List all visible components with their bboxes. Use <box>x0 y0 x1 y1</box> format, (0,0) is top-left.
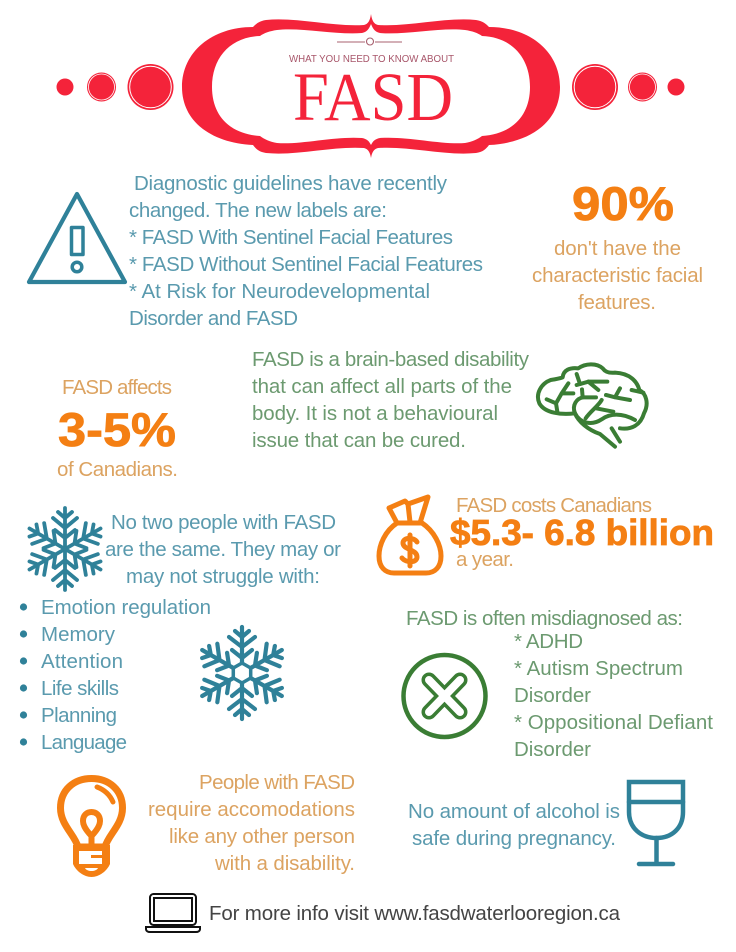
text: diagnostic guidelines: Diagnostic guidelines have recently <box>134 172 448 195</box>
decorative circles right <box>572 64 684 110</box>
stat number: 3-5% <box>58 403 176 456</box>
icon: wine glass <box>629 782 683 864</box>
text: misdiagnosed: * Oppositional Defiant <box>514 711 713 734</box>
text: accommodations: People with FASD <box>199 771 355 794</box>
icon: warning triangle <box>29 194 125 282</box>
icon: money bag <box>379 497 441 573</box>
stat caption: features. <box>578 291 656 314</box>
text: diagnostic guidelines <box>129 172 483 330</box>
text: misdiagnosed: * ADHD <box>514 630 583 653</box>
stat caption: of Canadians. <box>57 458 178 481</box>
stat: 90% <box>532 177 703 314</box>
text: brain-based disability: issue that can be cured. <box>252 429 466 452</box>
title banner <box>56 14 684 158</box>
icon: light bulb <box>60 778 122 877</box>
icon: snowflake one <box>23 508 107 590</box>
text: no alcohol: safe during pregnancy. <box>412 827 616 850</box>
footer text: For more info visit www.fasdwaterlooregion.ca <box>209 902 621 925</box>
text: no two people: No two people with FASD <box>111 511 336 534</box>
text: diagnostic guidelines: * At Risk for Neurodevelopmental <box>129 280 430 303</box>
ornate red frame <box>182 14 560 158</box>
list: struggles: Memory <box>41 623 116 646</box>
text: diagnostic guidelines: * FASD With Sentinel Facial Features <box>129 226 453 249</box>
text: accommodations <box>148 771 355 875</box>
text: no alcohol: No amount of alcohol is <box>408 800 620 823</box>
text: no two people: are the same. They may or <box>105 538 341 561</box>
text: accommodations: require accomodations <box>148 798 355 821</box>
list: struggles: Planning <box>41 704 117 727</box>
text: brain-based disability: body. It is not a behavioural <box>252 402 498 425</box>
stat: 90%: 90% <box>572 177 674 230</box>
stat number: $5.3- 6.8 billion <box>450 512 714 553</box>
text: accommodations: like any other person <box>169 825 355 848</box>
text: accommodations: with a disability. <box>214 852 355 875</box>
text: brain-based disability: that can affect all parts of the <box>252 375 512 398</box>
text: diagnostic guidelines: * FASD Without Sentinel Facial Features <box>129 253 483 276</box>
text: no two people <box>105 511 341 588</box>
FASD heading: FASD <box>293 59 453 135</box>
stat caption: a year. <box>456 548 514 571</box>
list: struggles: Attention <box>41 650 123 673</box>
list: struggles: Emotion regulation <box>41 596 211 619</box>
text: brain-based disability: FASD is a brain-based disability <box>252 348 530 371</box>
icon: laptop <box>146 894 200 932</box>
text: misdiagnosed <box>406 607 713 761</box>
text: no alcohol <box>408 800 620 850</box>
stat caption <box>532 237 703 314</box>
stat: 3-5% <box>57 376 178 481</box>
text: misdiagnosed: Disorder <box>514 684 591 707</box>
stat lead-in: FASD affects <box>62 376 172 399</box>
icon: X in circle <box>404 655 486 737</box>
ornament line <box>337 38 402 45</box>
list: struggles: Language <box>41 731 127 754</box>
stat caption: characteristic facial <box>532 264 703 287</box>
text: misdiagnosed: Disorder <box>514 738 591 761</box>
list: struggles: Life skills <box>41 677 119 700</box>
text: diagnostic guidelines: Disorder and FASD <box>129 307 298 330</box>
list: struggles <box>20 596 211 754</box>
stat lead-in: FASD costs Canadians <box>456 494 652 517</box>
text: no two people: may not struggle with: <box>126 565 320 588</box>
decorative circles left <box>56 64 174 110</box>
icon: snowflake two <box>196 627 288 719</box>
stat: cost <box>450 494 714 571</box>
text: misdiagnosed: * Autism Spectrum <box>514 657 683 680</box>
text: diagnostic guidelines: changed. The new labels are: <box>129 199 387 222</box>
text: brain-based disability <box>252 348 530 452</box>
stat caption: don't have the <box>554 237 681 260</box>
kicker: WHAT YOU NEED TO KNOW ABOUT <box>289 53 455 65</box>
text: misdiagnosed: FASD is often misdiagnosed as: <box>406 607 683 630</box>
icon: brain <box>538 364 647 447</box>
